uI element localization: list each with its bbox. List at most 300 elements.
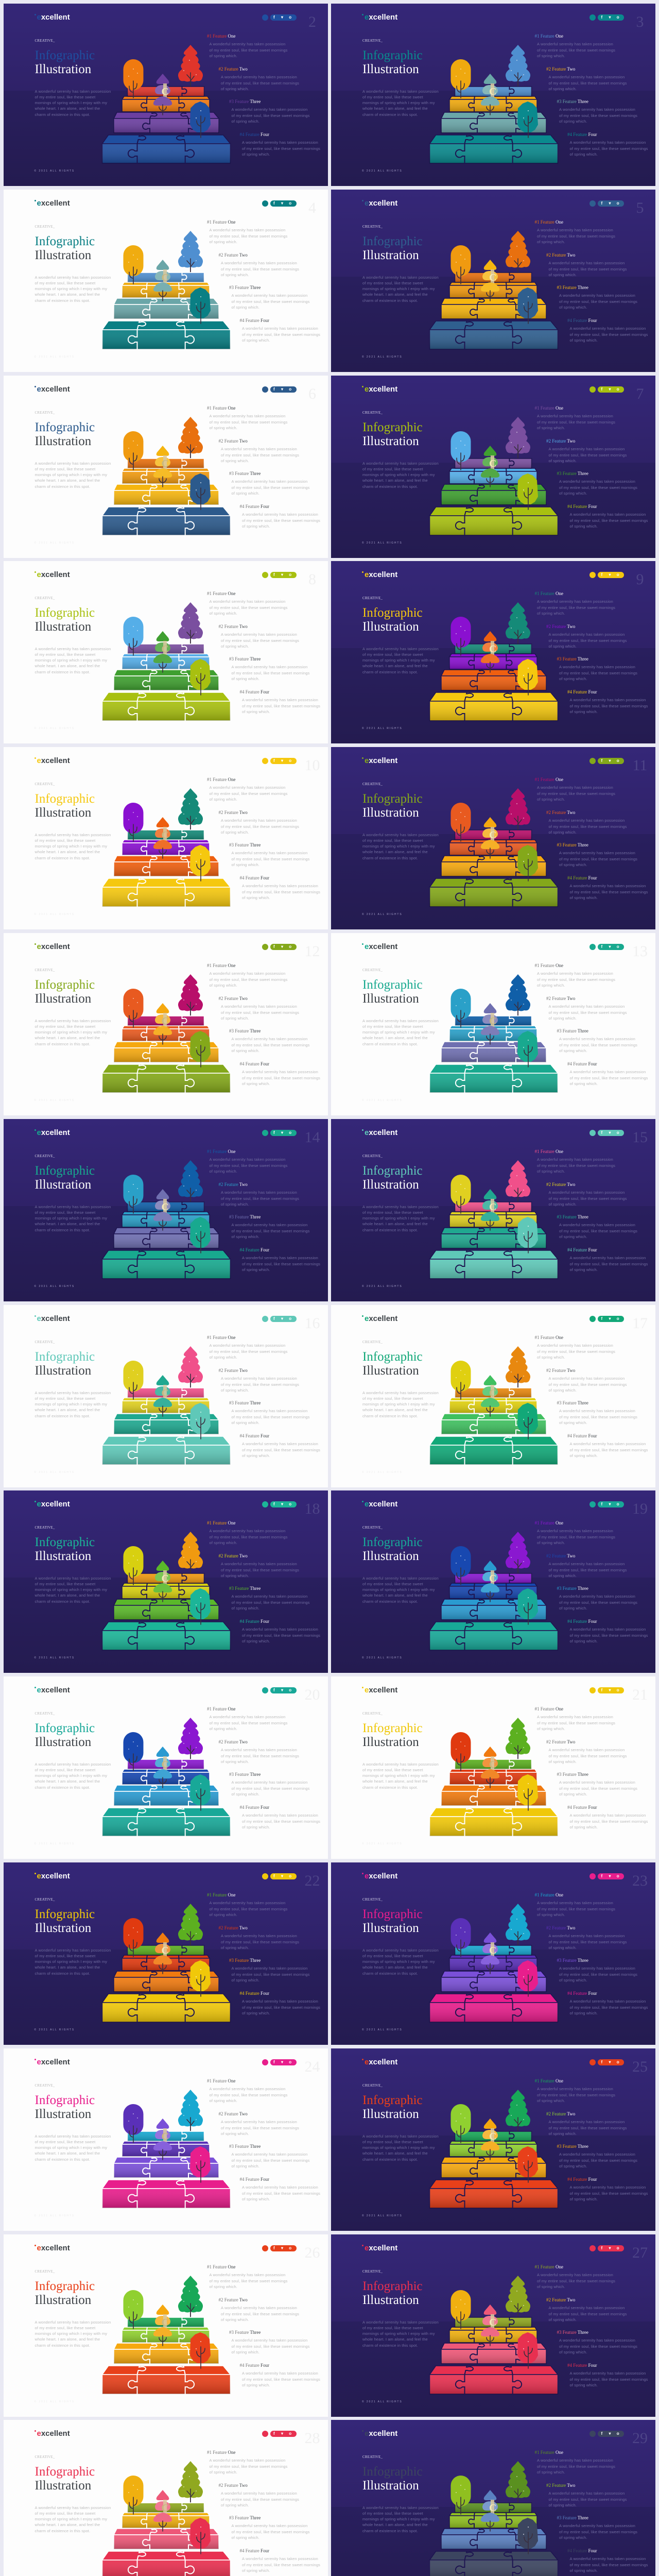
social icons: ▾ (281, 2246, 283, 2250)
feature three (229, 1028, 310, 1054)
intro text: mornings of spring which I enjoy with my (362, 1402, 435, 1406)
intro text: charm of existence in this spot. (35, 2343, 90, 2348)
watermark: C (489, 1015, 496, 1027)
heading: CREATIVE_ (362, 782, 383, 786)
feature three (557, 470, 637, 497)
social icons (589, 1316, 624, 1322)
feature two: of spring which. (221, 1202, 249, 1207)
feature four: #4 Feature Four (567, 132, 597, 137)
feature four: of spring which. (569, 2197, 598, 2201)
heading (35, 1896, 95, 1935)
feature one: of my entire soul, like these sweet mornings (537, 791, 615, 796)
feature one: of spring which. (537, 2470, 565, 2475)
feature one: #1 Feature One (207, 33, 236, 39)
feature three: of my entire soul, like these sweet mornings (559, 1600, 637, 1605)
logo: excellent (37, 756, 70, 765)
heading: Illustration (362, 1549, 419, 1563)
feature three: of my entire soul, like these sweet mornings (559, 1415, 637, 1419)
intro text: A wonderful serenity has taken possession (35, 2505, 111, 2510)
feature one (207, 1148, 288, 1175)
intro text (362, 1018, 439, 1047)
feature two: of my entire soul, like these sweet mornings (221, 453, 299, 457)
feature four (567, 1990, 648, 2016)
social icons: ▾ (609, 387, 611, 392)
footer: © 2021 ALL RIGHTS (34, 2400, 75, 2403)
feature two: A wonderful serenity has taken possession (549, 1190, 625, 1195)
intro text: A wonderful serenity has taken possession (362, 1018, 439, 1023)
social icons: o (289, 2060, 291, 2064)
social icons (589, 14, 624, 21)
intro text: mornings of spring which I enjoy with my (35, 2145, 107, 2150)
page number: 13 (632, 943, 648, 960)
feature three: A wonderful serenity has taken possession (232, 851, 307, 855)
feature two: #2 Feature Two (218, 996, 248, 1001)
feature three: of my entire soul, like these sweet mornings (559, 2158, 637, 2163)
feature one: of spring which. (209, 240, 237, 244)
social icons: ▾ (281, 572, 283, 577)
feature three: A wonderful serenity has taken possession (232, 107, 307, 112)
social icons: ▾ (609, 1502, 611, 1506)
feature four (240, 689, 320, 715)
feature one: of spring which. (209, 426, 237, 430)
feature one: of spring which. (209, 1169, 237, 1174)
intro text: mornings of spring which I enjoy with my (362, 286, 435, 291)
page number: 17 (632, 1315, 648, 1332)
heading: Illustration (35, 806, 91, 819)
feature two: A wonderful serenity has taken possession (221, 818, 297, 823)
page number: 22 (305, 1872, 320, 1889)
feature three: #3 Feature Three (557, 1772, 588, 1777)
puzzle pyramid with trees (426, 2273, 560, 2397)
intro text (362, 461, 439, 489)
slide 27 (331, 2234, 655, 2417)
social icons: f (273, 201, 275, 206)
feature four: of my entire soul, like these sweet mornings (242, 1262, 320, 1266)
watermark: C (162, 1759, 169, 1770)
intro text: A wonderful serenity has taken possession (35, 1205, 111, 1209)
intro text: charm of existence in this spot. (362, 112, 418, 117)
feature one: of my entire soul, like these sweet mornings (209, 977, 288, 982)
feature three: A wonderful serenity has taken possession (232, 1223, 307, 1227)
heading: Infographic (35, 2093, 95, 2107)
feature two: #2 Feature Two (546, 1182, 575, 1187)
feature four: of spring which. (569, 152, 598, 157)
feature four: #4 Feature Four (240, 875, 269, 880)
slide 25 (331, 2048, 655, 2231)
heading: Infographic (35, 978, 95, 991)
feature two: of spring which. (549, 2317, 577, 2322)
intro text: mornings of spring which I enjoy with my (362, 2517, 435, 2521)
feature four: A wonderful serenity has taken possession (242, 2371, 318, 2376)
feature two: of my entire soul, like these sweet mornings (549, 267, 627, 272)
intro text: charm of existence in this spot. (35, 298, 90, 303)
feature four: of my entire soul, like these sweet mornings (242, 1819, 320, 1824)
heading: CREATIVE_ (35, 1897, 55, 1902)
feature two (546, 2297, 627, 2323)
feature three: of spring which. (232, 2164, 259, 2168)
feature one: A wonderful serenity has taken possession (209, 1529, 285, 1533)
feature three: #3 Feature Three (229, 471, 261, 476)
heading: CREATIVE_ (35, 225, 55, 229)
intro text: of my entire soul, like these sweet (35, 1024, 95, 1029)
feature four: of spring which. (242, 709, 270, 714)
feature two: #2 Feature Two (218, 2297, 248, 2302)
feature one: #1 Feature One (207, 963, 236, 968)
feature four: of spring which. (569, 709, 598, 714)
intro text: charm of existence in this spot. (362, 1599, 418, 1604)
social icons: f (273, 15, 275, 20)
page number: 20 (305, 1686, 320, 1703)
feature two: A wonderful serenity has taken possession (221, 261, 297, 265)
heading: Illustration (362, 248, 419, 262)
feature one: of my entire soul, like these sweet mornings (537, 420, 615, 425)
feature one: #1 Feature One (534, 963, 563, 968)
feature two: of my entire soul, like these sweet mornings (549, 2126, 627, 2130)
feature three: #3 Feature Three (229, 1586, 261, 1591)
heading (362, 967, 423, 1006)
intro text (362, 1390, 439, 1419)
feature four: of my entire soul, like these sweet mornings (569, 1819, 648, 1824)
heading: Infographic (362, 234, 423, 248)
feature two (218, 1367, 299, 1394)
social icons (589, 572, 624, 578)
page number: 29 (632, 2430, 648, 2447)
footer: © 2021 ALL RIGHTS (362, 2028, 403, 2031)
social icons: o (617, 2246, 619, 2250)
intro text: whole heart. I am alone, and feel the (35, 2337, 100, 2342)
intro text: mornings of spring which I enjoy with my (362, 658, 435, 663)
heading: CREATIVE_ (35, 596, 55, 600)
watermark: C (489, 1201, 496, 1213)
heading: CREATIVE_ (362, 1526, 383, 1530)
feature two: of my entire soul, like these sweet mornings (549, 453, 627, 457)
feature two: of spring which. (549, 87, 577, 91)
intro text: whole heart. I am alone, and feel the (35, 1408, 100, 1412)
feature two: A wonderful serenity has taken possession (549, 2120, 625, 2124)
feature one: #1 Feature One (207, 2450, 236, 2455)
intro text (35, 1575, 111, 1604)
social icons (589, 2245, 624, 2251)
heading (362, 39, 423, 76)
intro text: mornings of spring which I enjoy with my (35, 1402, 107, 1406)
feature two: A wonderful serenity has taken possession (549, 261, 625, 265)
feature one: of spring which. (537, 2284, 565, 2289)
feature two (546, 1367, 627, 1394)
heading (35, 1710, 95, 1749)
watermark: C (489, 2317, 496, 2328)
feature two (218, 2297, 299, 2323)
feature three: of spring which. (232, 2535, 259, 2540)
feature one: of spring which. (537, 426, 565, 430)
feature four: of spring which. (242, 1825, 270, 1829)
intro text: mornings of spring which I enjoy with my (362, 1216, 435, 1221)
footer: © 2021 ALL RIGHTS (34, 541, 75, 545)
feature four: of my entire soul, like these sweet mornings (569, 704, 648, 708)
feature three (557, 99, 637, 124)
slide 12 (3, 933, 327, 1115)
feature two: A wonderful serenity has taken possession (549, 1748, 625, 1752)
social icons: o (289, 1688, 291, 1692)
feature three: of my entire soul, like these sweet mornings (232, 857, 310, 861)
page number: 24 (305, 2058, 320, 2075)
feature one: A wonderful serenity has taken possession (537, 599, 613, 604)
feature four (240, 503, 320, 530)
feature four: #4 Feature Four (567, 1991, 597, 1996)
intro text (35, 1947, 111, 1976)
puzzle pyramid with trees (426, 2459, 560, 2576)
feature one: #1 Feature One (534, 1706, 563, 1711)
feature one (207, 2078, 288, 2104)
intro text: charm of existence in this spot. (35, 1042, 90, 1046)
social icons: ▾ (281, 2060, 283, 2064)
feature three: of spring which. (232, 1792, 259, 1797)
heading: Infographic (35, 1907, 95, 1921)
social icons: ▾ (609, 2431, 611, 2436)
watermark: C (162, 1573, 169, 1584)
intro text: A wonderful serenity has taken possession (362, 461, 439, 466)
feature four: of spring which. (242, 2568, 270, 2573)
intro text: whole heart. I am alone, and feel the (35, 1593, 100, 1598)
footer: © 2021 ALL RIGHTS (34, 1099, 75, 1102)
intro text: mornings of spring which I enjoy with my (35, 1030, 107, 1035)
heading: Illustration (362, 434, 419, 448)
slide 24 (3, 2048, 327, 2231)
puzzle pyramid with trees (99, 1529, 233, 1653)
feature two (546, 252, 627, 277)
feature two (218, 809, 299, 836)
feature four (567, 2548, 648, 2574)
feature three (229, 1771, 310, 1798)
feature one: of spring which. (537, 797, 565, 802)
intro text: mornings of spring which I enjoy with my (35, 2331, 107, 2336)
watermark: C (489, 458, 496, 469)
intro text: whole heart. I am alone, and feel the (35, 2522, 100, 2527)
feature three (229, 2515, 310, 2541)
page number: 26 (305, 2244, 320, 2261)
watermark: C (489, 2502, 496, 2514)
intro text: A wonderful serenity has taken possession (362, 646, 439, 651)
feature four: A wonderful serenity has taken possession (569, 2371, 646, 2376)
feature one: A wonderful serenity has taken possession (537, 1157, 613, 1162)
social icons: o (289, 2246, 291, 2250)
intro text: whole heart. I am alone, and feel the (35, 1965, 100, 1970)
heading: Illustration (362, 2107, 419, 2121)
feature three (229, 2143, 310, 2170)
social icons: ▾ (609, 1688, 611, 1692)
heading: CREATIVE_ (35, 2455, 55, 2459)
puzzle pyramid with trees (99, 414, 233, 538)
social icons: f (601, 758, 602, 763)
feature three: #3 Feature Three (557, 1028, 588, 1033)
footer: © 2021 ALL RIGHTS (362, 1471, 403, 1474)
feature three: of spring which. (232, 862, 259, 867)
intro text: of my entire soul, like these sweet (362, 1024, 423, 1029)
feature four: #4 Feature Four (240, 1061, 269, 1066)
feature one: #1 Feature One (207, 1149, 236, 1154)
feature three: A wonderful serenity has taken possession (559, 1966, 635, 1971)
feature three: #3 Feature Three (229, 1958, 261, 1963)
feature one (534, 2078, 615, 2104)
intro text: of my entire soul, like these sweet (35, 1396, 95, 1401)
feature two: #2 Feature Two (546, 2111, 575, 2116)
feature four: A wonderful serenity has taken possession (242, 1999, 318, 2004)
feature one: #1 Feature One (534, 1335, 563, 1340)
social icons: o (289, 572, 291, 577)
feature one: #1 Feature One (207, 219, 236, 225)
social icons (262, 2245, 297, 2251)
social icons: o (617, 1502, 619, 1506)
feature one: A wonderful serenity has taken possession (537, 2273, 613, 2277)
feature two: of spring which. (221, 644, 249, 649)
feature three: A wonderful serenity has taken possession (232, 665, 307, 669)
feature three: of spring which. (559, 862, 587, 867)
feature two (546, 995, 627, 1022)
page number: 27 (632, 2244, 648, 2261)
feature four (240, 2362, 320, 2388)
puzzle pyramid with trees (99, 2273, 233, 2397)
feature two: of spring which. (221, 2503, 249, 2507)
footer: © 2021 ALL RIGHTS (34, 2028, 75, 2031)
slide 2 (3, 4, 327, 186)
logo: excellent (37, 13, 70, 22)
feature one: of spring which. (209, 2470, 237, 2475)
logo: excellent (365, 2058, 397, 2066)
intro text: of my entire soul, like these sweet (362, 1396, 423, 1401)
intro text (35, 832, 111, 861)
feature one: of my entire soul, like these sweet mornings (537, 1907, 615, 1911)
feature two (218, 995, 299, 1022)
feature one (207, 1706, 288, 1732)
feature four: A wonderful serenity has taken possession (242, 140, 318, 145)
feature one (534, 1334, 615, 1361)
intro text: mornings of spring which I enjoy with my (362, 1959, 435, 1964)
page number: 6 (308, 385, 316, 402)
feature one: of my entire soul, like these sweet mornings (537, 2464, 615, 2469)
feature four: #4 Feature Four (567, 2548, 597, 2553)
intro text: A wonderful serenity has taken possession (362, 1205, 439, 1209)
feature two (546, 438, 627, 464)
slide 5 (331, 190, 655, 372)
intro text: charm of existence in this spot. (362, 1042, 418, 1046)
intro text: of my entire soul, like these sweet (362, 1768, 423, 1772)
feature one (534, 776, 615, 803)
intro text: whole heart. I am alone, and feel the (35, 664, 100, 668)
feature four: A wonderful serenity has taken possession (569, 1256, 646, 1260)
puzzle pyramid with trees (99, 1715, 233, 1839)
social icons: f (273, 2060, 275, 2064)
feature two: of spring which. (221, 1016, 249, 1021)
feature one: of spring which. (537, 2098, 565, 2103)
heading (35, 1153, 95, 1191)
feature three: #3 Feature Three (229, 1772, 261, 1777)
heading: Illustration (362, 1921, 419, 1935)
social icons: o (617, 1688, 619, 1692)
intro text: charm of existence in this spot. (35, 1785, 90, 1790)
heading: CREATIVE_ (35, 2083, 55, 2088)
heading: CREATIVE_ (362, 596, 383, 600)
feature one: of my entire soul, like these sweet mornings (209, 420, 288, 425)
heading: Infographic (35, 48, 95, 62)
feature two: of my entire soul, like these sweet mornings (221, 1568, 299, 1572)
feature two (218, 438, 299, 464)
heading: Infographic (362, 420, 423, 434)
feature three: A wonderful serenity has taken possession (559, 2523, 635, 2528)
intro text: A wonderful serenity has taken possession (362, 1947, 439, 1953)
intro text (362, 1947, 439, 1976)
feature one: of spring which. (209, 797, 237, 802)
feature one: of my entire soul, like these sweet mornings (537, 1349, 615, 1354)
feature three: of my entire soul, like these sweet mornings (232, 485, 310, 490)
feature three: of spring which. (232, 491, 259, 496)
heading: Infographic (362, 978, 423, 991)
social icons: ▾ (609, 1316, 611, 1321)
intro text: of my entire soul, like these sweet (35, 652, 95, 657)
feature four: A wonderful serenity has taken possession (242, 1070, 318, 1074)
feature one (207, 405, 288, 431)
heading (362, 1153, 423, 1191)
intro text: whole heart. I am alone, and feel the (362, 478, 428, 483)
page number: 12 (305, 943, 320, 960)
feature two (546, 809, 627, 836)
intro text: whole heart. I am alone, and feel the (362, 1965, 428, 1970)
page number: 28 (305, 2430, 320, 2447)
feature one: of spring which. (209, 983, 237, 988)
heading: Illustration (35, 2293, 91, 2307)
social icons (262, 758, 297, 764)
feature one: of spring which. (209, 1726, 237, 1731)
feature two: of my entire soul, like these sweet mornings (221, 1754, 299, 1758)
feature one: A wonderful serenity has taken possession (209, 785, 285, 790)
page number: 18 (305, 1500, 320, 1517)
intro text: charm of existence in this spot. (35, 1971, 90, 1976)
intro text: A wonderful serenity has taken possession (35, 2319, 111, 2325)
page number: 4 (308, 199, 316, 216)
intro text: of my entire soul, like these sweet (35, 281, 95, 285)
heading: CREATIVE_ (35, 2269, 55, 2274)
logo: excellent (37, 2429, 70, 2438)
heading: Infographic (362, 791, 423, 806)
feature three: of my entire soul, like these sweet mornings (232, 2158, 310, 2163)
feature one: A wonderful serenity has taken possession (209, 228, 285, 232)
intro text (35, 89, 111, 117)
feature four: #4 Feature Four (240, 1619, 269, 1624)
feature four: A wonderful serenity has taken possession (569, 326, 646, 331)
intro text: whole heart. I am alone, and feel the (35, 106, 100, 111)
intro text: whole heart. I am alone, and feel the (362, 850, 428, 854)
intro text: A wonderful serenity has taken possession (35, 1762, 111, 1766)
social icons (589, 2059, 624, 2065)
feature one: A wonderful serenity has taken possession (537, 2458, 613, 2463)
feature three (229, 1214, 310, 1240)
feature two: A wonderful serenity has taken possession (221, 75, 297, 79)
feature three: of my entire soul, like these sweet mornings (232, 671, 310, 675)
feature four: of spring which. (569, 1825, 598, 1829)
intro text (362, 2505, 439, 2534)
feature one (534, 2264, 615, 2290)
logo: excellent (365, 1686, 397, 1694)
feature four (567, 2362, 648, 2388)
heading (362, 781, 423, 819)
footer: © 2021 ALL RIGHTS (362, 541, 403, 545)
intro text: charm of existence in this spot. (362, 2157, 418, 2162)
feature three: of spring which. (232, 2350, 259, 2354)
intro text: charm of existence in this spot. (362, 1228, 418, 1232)
heading: CREATIVE_ (362, 225, 383, 229)
feature two: #2 Feature Two (546, 252, 575, 258)
intro text: charm of existence in this spot. (362, 2343, 418, 2348)
feature four: #4 Feature Four (567, 1619, 597, 1624)
feature four: of my entire soul, like these sweet mornings (569, 2377, 648, 2382)
